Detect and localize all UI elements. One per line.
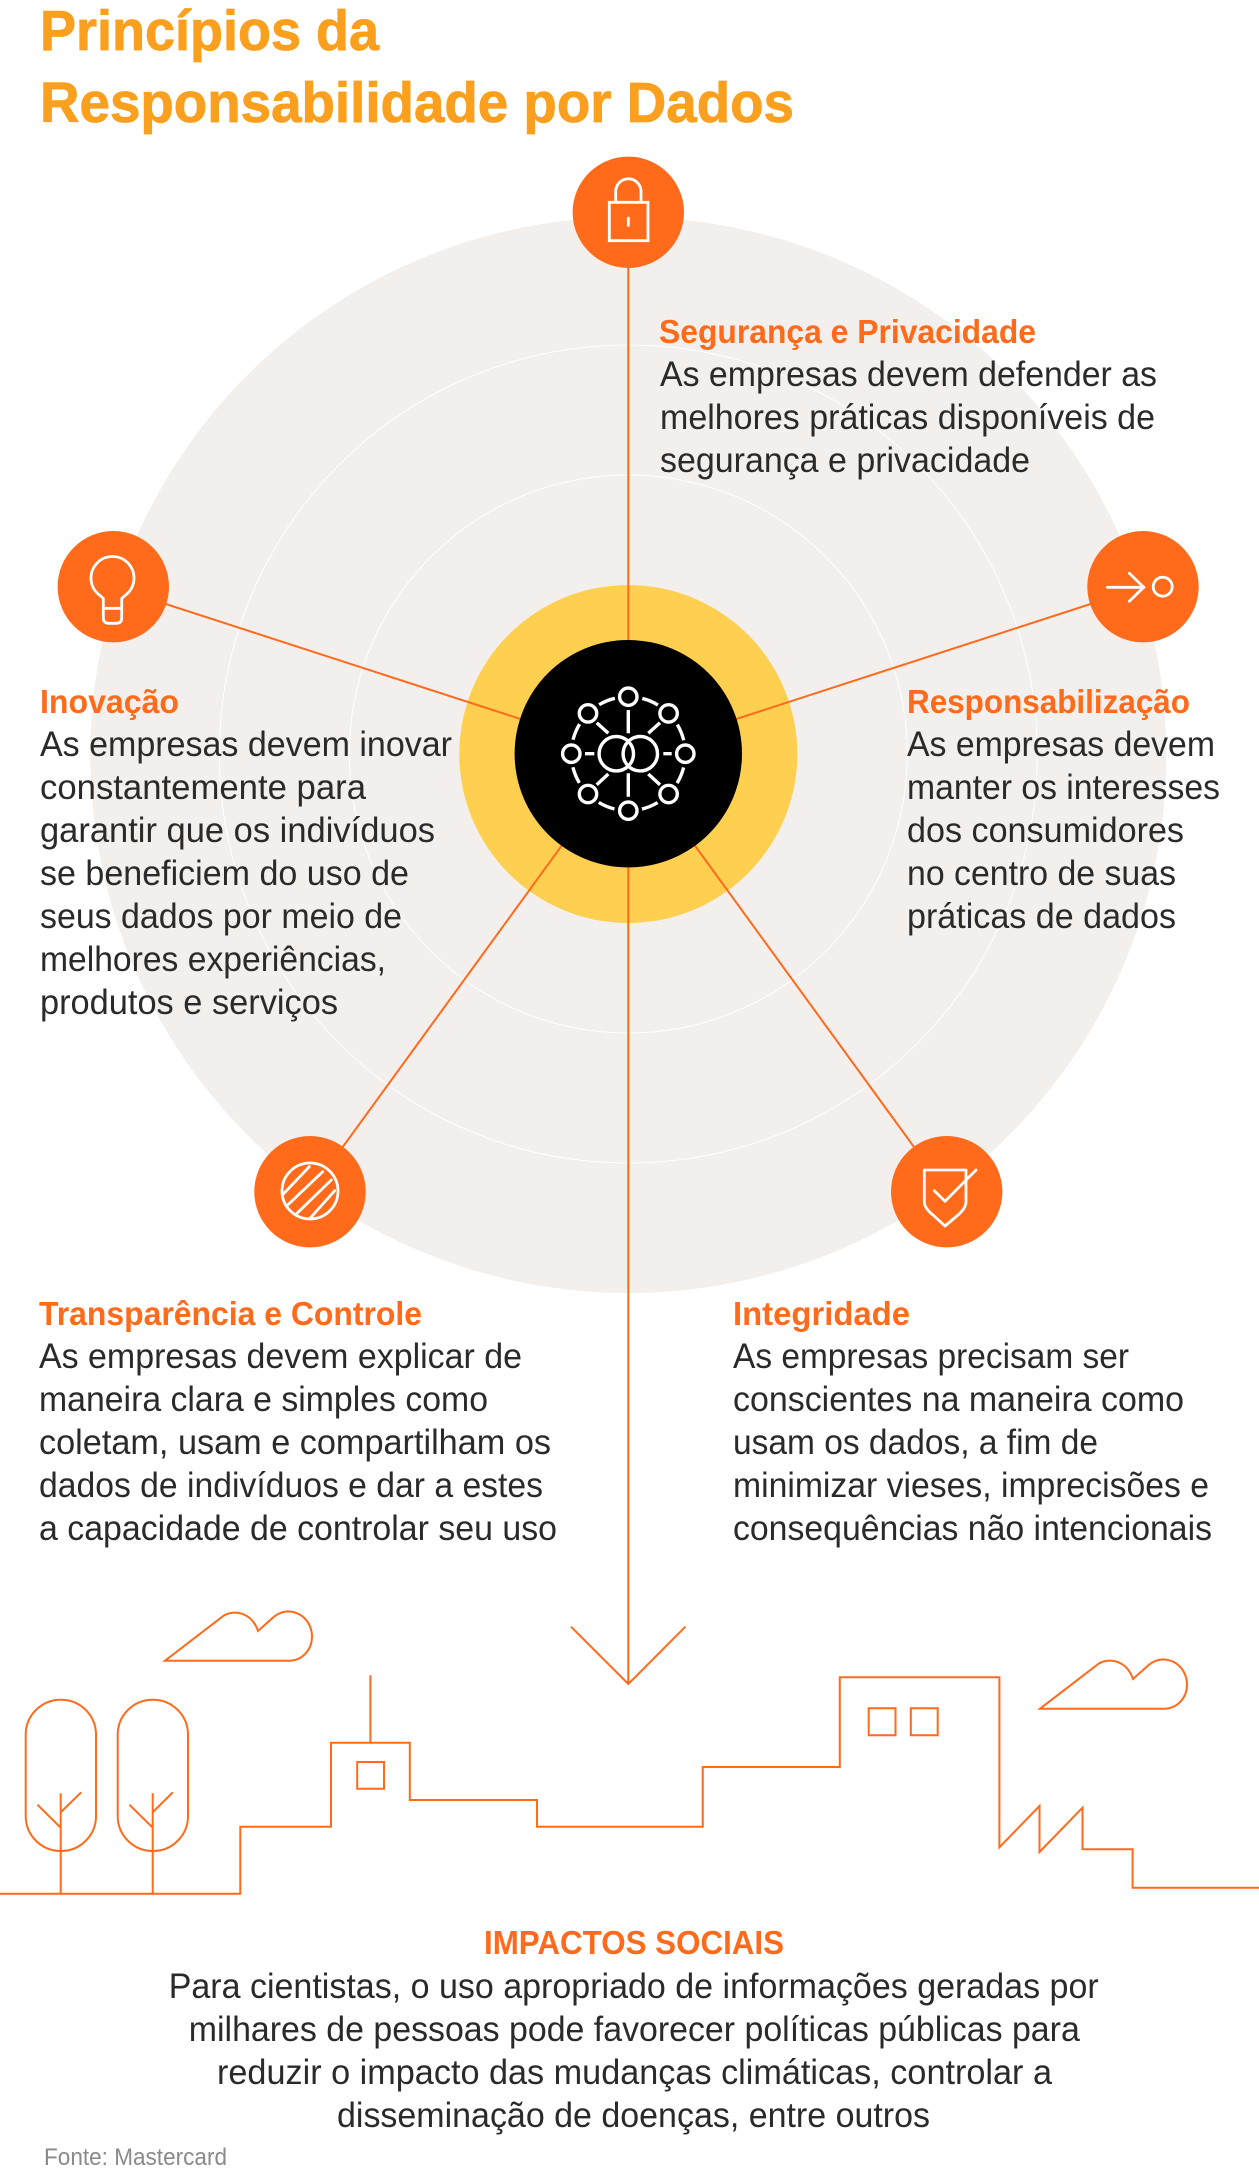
text block: Inovação: seus dados por meio de [40,897,402,936]
text block: Segurança e Privacidade: segurança e privacidade [660,441,1030,480]
skyline [0,1677,1259,1894]
text block: Transparência e Controle: coletam, usam e compartilham os [39,1423,551,1462]
text block: Integridade: Integridade [733,1295,910,1332]
text block: Integridade: minimizar vieses, imprecisões e [733,1466,1209,1505]
text block: Transparência e Controle [39,1295,557,1548]
text block: Responsabilização [907,683,1220,936]
text block: Impactos Sociais: reduzir o impacto das mudanças climáticas, controlar a [217,2053,1053,2092]
text block: Integridade: conscientes na maneira como [733,1380,1184,1419]
icon: arrow to circle [1087,531,1199,642]
text block: Responsabilização: práticas de dados [907,897,1176,936]
text block: Transparência e Controle: a capacidade de controlar seu uso [39,1509,557,1548]
icon: central data network [515,640,742,867]
icon: light bulb [58,531,169,642]
text block: Inovação: se beneficiem do uso de [40,854,409,893]
text block: Segurança e Privacidade: melhores práticas disponíveis de [660,398,1155,437]
title: Princípios da [40,0,380,63]
title: Responsabilidade por Dados [40,71,794,135]
text block: Integridade: consequências não intencionais [733,1509,1212,1548]
text block: Inovação: melhores experiências, [40,940,386,979]
text block: Transparência e Controle: As empresas devem explicar de [39,1337,522,1376]
icon: striped circle [254,1136,366,1247]
text block: Responsabilização: no centro de suas [907,854,1176,893]
text block: Responsabilização: As empresas devem [907,725,1215,764]
text block: Responsabilização: dos consumidores [907,811,1184,850]
antenna and windows [357,1675,938,1789]
connector lines [113,212,1143,1684]
text block: Inovação: Inovação [40,683,179,720]
text block: Inovação [40,683,452,1022]
arrow: pointing down to city [571,1627,685,1684]
text block: Inovação: As empresas devem inovar [40,725,452,764]
text block: Transparência e Controle: dados de indivíduos e dar a estes [39,1466,543,1505]
cityscape illustration [0,1611,1259,1894]
text block: Inovação: produtos e serviços [40,983,338,1022]
radial diagram background [90,217,1166,1293]
text block: Impactos Sociais: Para cientistas, o uso apropriado de informações geradas por [169,1967,1099,2006]
icon: shield with check [891,1136,1002,1247]
source note: Fonte: Mastercard [44,2144,227,2171]
text block: Responsabilização: Responsabilização [907,683,1190,720]
text block: Responsabilização: manter os interesses [907,768,1220,807]
text block: Impactos Sociais [169,1924,1099,2135]
text block: Segurança e Privacidade: As empresas devem defender as [660,355,1157,394]
text block: Segurança e Privacidade: Segurança e Privacidade [659,313,1036,350]
icon: lock [573,157,684,268]
text block: Transparência e Controle: maneira clara e simples como [39,1380,488,1419]
cloud right [1040,1659,1187,1709]
text block: Integridade: As empresas precisam ser [733,1337,1129,1376]
text block: Inovação: garantir que os indivíduos [40,811,435,850]
text block: Impactos Sociais: milhares de pessoas pode favorecer políticas públicas para [189,2010,1080,2049]
cloud left [165,1611,312,1661]
tree left [26,1700,96,1894]
text block: Segurança e Privacidade [659,313,1157,480]
text block: Impactos Sociais: disseminação de doenças, entre outros [337,2096,930,2135]
text block: Transparência e Controle: Transparência e Controle [39,1295,422,1332]
tree right [118,1700,188,1894]
text block: Impactos Sociais: IMPACTOS SOCIAIS [484,1924,784,1961]
text block: Integridade: usam os dados, a fim de [733,1423,1098,1462]
text block: Inovação: constantemente para [40,768,367,807]
title [40,0,794,135]
text block: Integridade [733,1295,1212,1548]
